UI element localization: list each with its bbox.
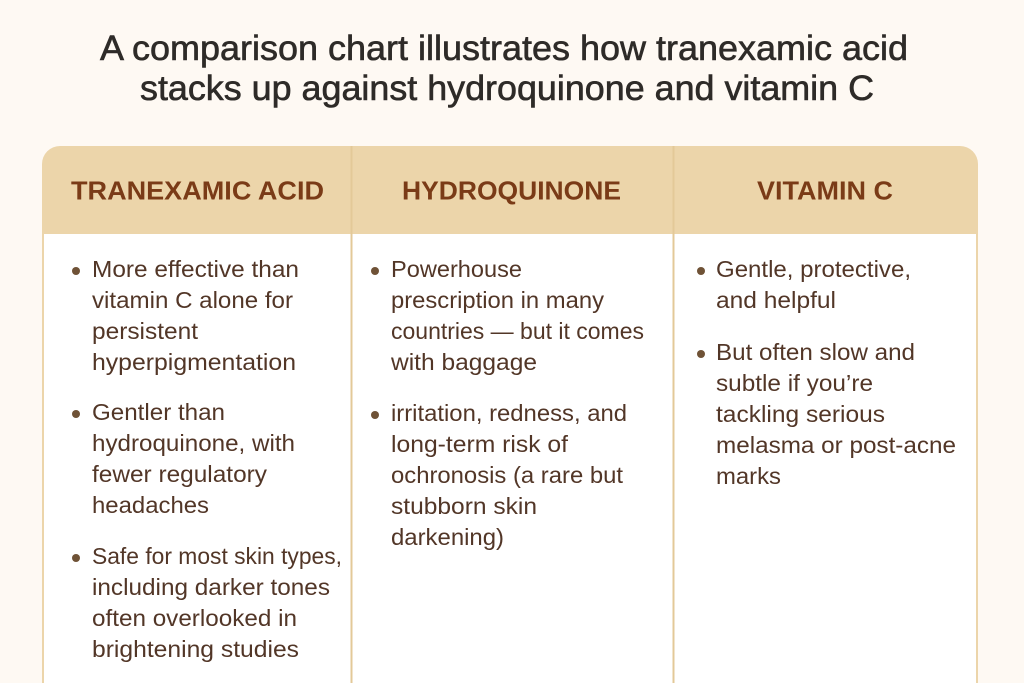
title: stacks up against hydroquinone and vitamin C bbox=[140, 69, 874, 108]
bullet: irritation: darkening) bbox=[391, 524, 504, 550]
bullet: powerhouse: prescription in many bbox=[391, 287, 604, 313]
header band bbox=[42, 146, 978, 234]
bullet: slow: marks bbox=[716, 463, 781, 489]
table body bbox=[43, 234, 977, 683]
column: vitamin c bbox=[697, 176, 956, 489]
bullet: irritation: stubborn skin bbox=[391, 493, 537, 519]
table side borders bbox=[43, 234, 977, 683]
bullet: gentler: Gentler than bbox=[92, 399, 225, 425]
bullet: safe: brightening studies bbox=[92, 636, 299, 662]
bullet: gentler: hydroquinone, with bbox=[92, 430, 295, 456]
bullet: safe: often overlooked in bbox=[92, 605, 297, 631]
bullet: powerhouse bbox=[371, 256, 644, 375]
bullet: more effective: hyperpigmentation bbox=[92, 349, 296, 375]
bullet: powerhouse: with baggage bbox=[390, 349, 537, 375]
bullet: irritation: ochronosis (a rare but bbox=[391, 462, 623, 488]
column dividers bbox=[352, 146, 674, 683]
bullet: more effective: persistent bbox=[92, 318, 198, 344]
bullet: irritation: long-term risk of bbox=[391, 431, 568, 457]
bullet: more effective: vitamin C alone for bbox=[92, 287, 293, 313]
heading: vitamin c: VITAMIN C bbox=[757, 176, 893, 206]
bullet: safe bbox=[72, 543, 342, 662]
bullet: slow: tackling serious bbox=[716, 401, 885, 427]
bullet: gentle: and helpful bbox=[716, 287, 836, 313]
column: hydroquinone bbox=[371, 176, 644, 550]
column: tranexamic acid bbox=[71, 176, 342, 662]
bullet: slow bbox=[697, 339, 956, 489]
bullet: more effective bbox=[72, 256, 299, 375]
title bbox=[100, 29, 908, 108]
bullet: slow: melasma or post-acne bbox=[716, 432, 956, 458]
bullet: gentler: headaches bbox=[92, 492, 209, 518]
bullet: gentler bbox=[72, 399, 295, 518]
bullet: gentler: fewer regulatory bbox=[92, 461, 267, 487]
bullet: slow: But often slow and bbox=[716, 339, 915, 365]
bullet: irritation: irritation, redness, and bbox=[391, 400, 627, 426]
bullet: irritation bbox=[371, 400, 627, 550]
heading: tranexamic acid: TRANEXAMIC ACID bbox=[71, 176, 324, 206]
bullet: gentle bbox=[697, 256, 911, 313]
heading: hydroquinone: HYDROQUINONE bbox=[402, 176, 621, 206]
bullet: powerhouse: Powerhouse bbox=[391, 256, 522, 282]
bullet: safe: including darker tones bbox=[92, 574, 330, 600]
bullet: safe: Safe for most skin types, bbox=[92, 543, 342, 569]
bullet: more effective: More effective than bbox=[92, 256, 299, 282]
bullet: slow: subtle if you’re bbox=[716, 370, 873, 396]
bullet: powerhouse: countries — but it comes bbox=[391, 318, 644, 344]
comparison table bbox=[42, 146, 978, 683]
title: A comparison chart illustrates how tranexamic acid bbox=[100, 29, 908, 68]
bullet: gentle: Gentle, protective, bbox=[716, 256, 911, 282]
